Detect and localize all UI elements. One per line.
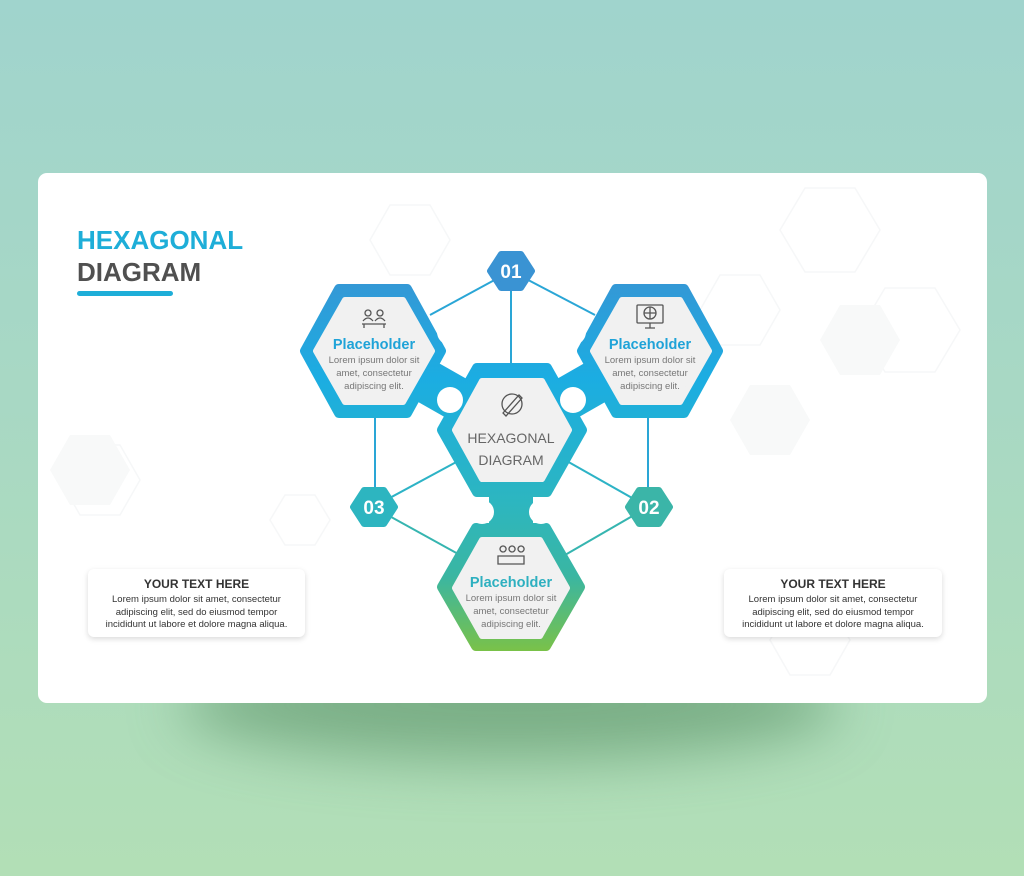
text box right: incididunt ut labore et dolore magna aliqua. (742, 619, 924, 630)
hex texts: Placeholder (609, 337, 691, 353)
inner hexes (316, 300, 709, 636)
hex texts: adipiscing elit. (620, 381, 680, 392)
hex texts: Placeholder (470, 575, 552, 591)
number badges (353, 254, 670, 524)
text box left: incididunt ut labore et dolore magna aliqua. (106, 619, 287, 630)
hex texts: Lorem ipsum dolor sit (329, 355, 420, 366)
text box left: YOUR TEXT HERE (144, 577, 249, 591)
hex texts: Lorem ipsum dolor sit (605, 355, 696, 366)
diagram: 03 (363, 498, 385, 519)
hex texts: amet, consectetur (336, 368, 412, 379)
blue hex network (305, 289, 718, 646)
hex texts: Placeholder (333, 337, 415, 353)
connector lines (373, 271, 648, 555)
text box right: YOUR TEXT HERE (780, 577, 886, 591)
text box right (724, 569, 942, 637)
hex texts: DIAGRAM (478, 452, 544, 468)
hex texts (329, 337, 696, 630)
title: HEXAGONAL (77, 225, 243, 255)
text box left: Lorem ipsum dolor sit amet, consectetur (112, 594, 281, 605)
icons (362, 305, 663, 564)
text box left (88, 569, 305, 637)
hex texts: amet, consectetur (612, 368, 688, 379)
text box right: Lorem ipsum dolor sit amet, consectetur (749, 594, 917, 605)
hex texts: adipiscing elit. (344, 381, 404, 392)
title (77, 225, 243, 296)
hex texts: adipiscing elit. (481, 619, 541, 630)
diagram: 01 (500, 262, 522, 283)
title: DIAGRAM (77, 257, 201, 287)
text box right: adipiscing elit, sed do eiusmod tempor (752, 606, 914, 618)
text box left: adipiscing elit, sed do eiusmod tempor (116, 606, 277, 618)
card panel (38, 173, 987, 703)
white notches (437, 319, 586, 524)
hex texts: HEXAGONAL (467, 430, 555, 446)
diagram: 02 (638, 498, 660, 519)
hex texts: Lorem ipsum dolor sit (466, 593, 557, 604)
hex texts: amet, consectetur (473, 606, 549, 617)
